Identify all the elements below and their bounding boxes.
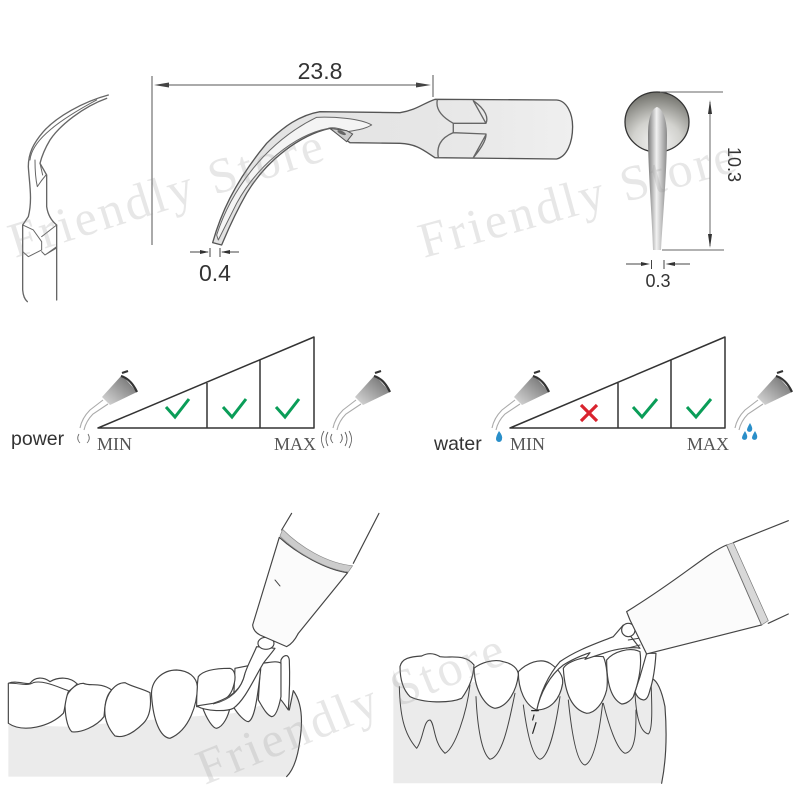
icon: handpiece at minimum power	[78, 371, 137, 443]
watermark: bottom: Friendly Store	[188, 620, 515, 795]
check: low power	[166, 399, 189, 417]
dimension: height 10.3: 10.3	[724, 147, 744, 182]
icon: handpiece at maximum water	[735, 371, 792, 440]
dimension: overall length 23.8: 23.8	[298, 58, 342, 84]
icon: handpiece at maximum power	[322, 371, 390, 448]
chart: water triangle scale	[510, 337, 725, 428]
dimension: tip width 0.4: 0.4	[199, 260, 231, 286]
dimension: tip width 0.4	[190, 248, 239, 286]
dimension: overall length 23.8	[152, 58, 433, 245]
label: power min: MIN	[97, 434, 132, 454]
icon: handpiece at minimum water	[492, 371, 549, 442]
label: water: water	[433, 433, 482, 455]
label: water min: MIN	[510, 434, 545, 454]
watermark: top right: Friendly Store	[412, 127, 744, 269]
label: water max: MAX	[687, 434, 729, 454]
check: medium power	[223, 399, 246, 417]
watermark: top left: Friendly Store	[1, 116, 333, 268]
dimension: tip width 0.3: 0.3	[645, 271, 671, 291]
icon: large side view of tip	[213, 99, 573, 245]
cross: low water not allowed	[581, 405, 597, 421]
dimension: tip width 0.3	[626, 260, 690, 291]
check: high water	[687, 399, 711, 417]
dimension: height 10.3	[660, 92, 744, 250]
chart: power triangle scale	[98, 337, 314, 428]
label: power: power	[11, 428, 65, 450]
illustration: scaling below the gum line	[393, 521, 788, 783]
label: power max: MAX	[274, 434, 316, 454]
icon: small side view of tip	[23, 95, 108, 302]
icon: front view of tip	[625, 92, 689, 250]
check: high power	[276, 399, 299, 417]
check: medium water	[633, 399, 657, 417]
illustration: scaling above the gum line	[8, 513, 379, 777]
